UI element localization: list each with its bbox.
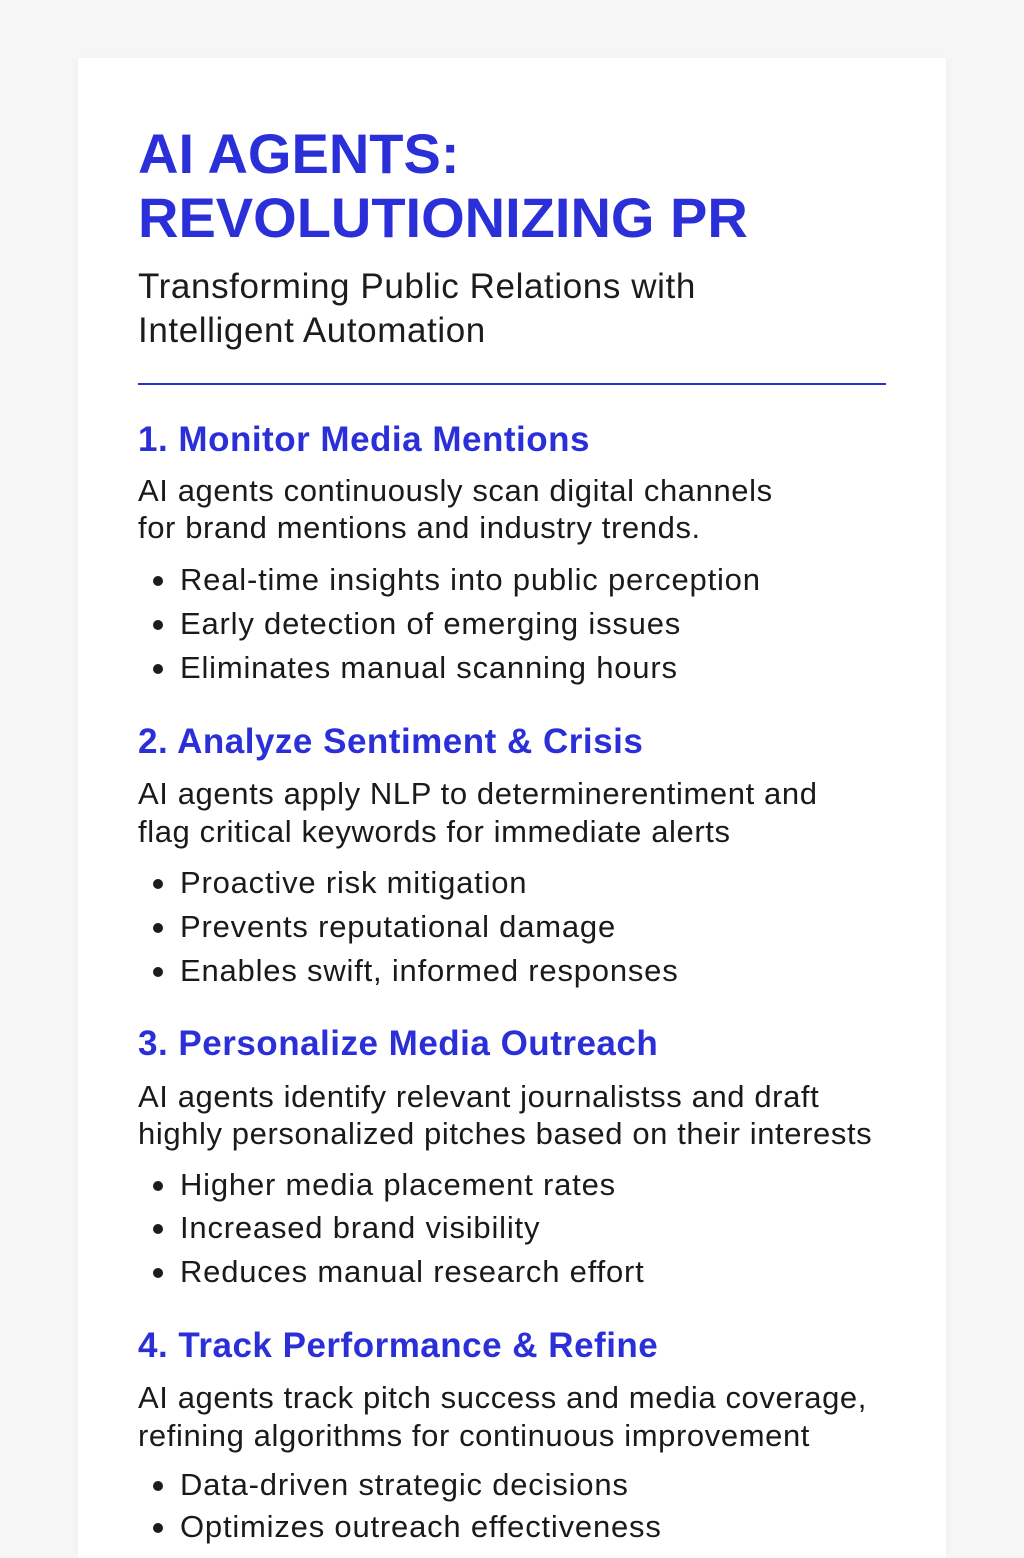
text: Optimizes outreach effectiveness [180,1509,662,1544]
section 4 body: AI agents track pitch success and media coverage, [138,1380,867,1415]
section 1 body [138,473,773,545]
section 4 bullets [153,1467,662,1544]
text: Proactive risk mitigation [180,865,527,900]
title [138,122,748,249]
section 1 body: AI agents continuously scan digital channels [138,473,773,508]
title: AI AGENTS: [138,122,459,185]
section 2 body: AI agents apply NLP to determinerentiment and [138,776,818,811]
text: Eliminates manual scanning hours [180,650,678,685]
section 3 body: AI agents identify relevant journalistss and draft [138,1079,819,1114]
section 2 bullets [153,865,679,988]
text: Real-time insights into public perception [180,562,761,597]
subtitle: Transforming Public Relations with [138,267,696,306]
divider [138,383,886,385]
text: Reduces manual research effort [180,1254,645,1289]
text: Early detection of emerging issues [180,606,681,641]
text: Increased brand visibility [180,1210,540,1245]
subtitle [138,267,696,350]
section 3 body [138,1079,872,1151]
title: REVOLUTIONIZING PR [138,186,748,249]
subtitle: Intelligent Automation [138,311,486,350]
section 3 bullets [153,1167,645,1289]
section 1 bullets [153,562,761,685]
section 2 heading: 2. Analyze Sentiment & Crisis [138,722,643,761]
section 2 body: flag critical keywords for immediate alerts [138,814,731,849]
section 4 heading: 4. Track Performance & Refine [138,1326,658,1365]
section 1 body: for brand mentions and industry trends. [138,510,701,545]
text: Prevents reputational damage [180,909,616,944]
section 1 heading: 1. Monitor Media Mentions [138,420,590,459]
text: Enables swift, informed responses [180,953,679,988]
section 2 body [138,776,818,849]
text: Higher media placement rates [180,1167,616,1202]
section 3 body: highly personalized pitches based on their interests [138,1116,872,1151]
section 4 body: refining algorithms for continuous improvement [138,1418,810,1453]
section 4 body [138,1380,867,1453]
section 3 heading: 3. Personalize Media Outreach [138,1024,658,1063]
text: Data-driven strategic decisions [180,1467,629,1502]
